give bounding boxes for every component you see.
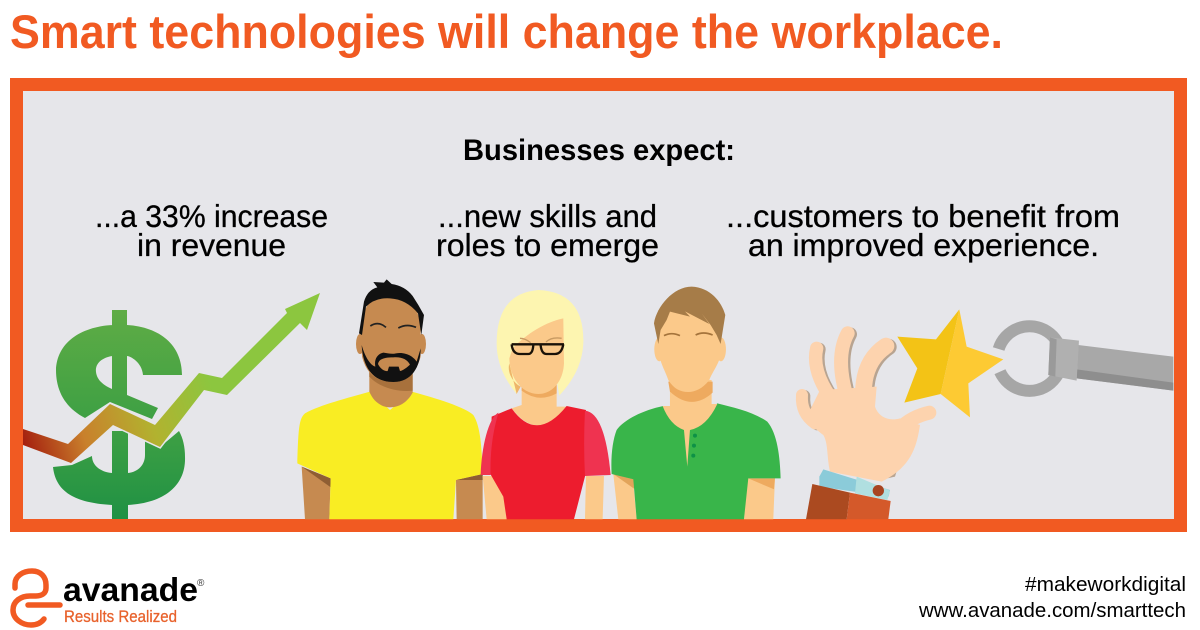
text block: customers: ...customers to benefit from <box>726 198 1120 234</box>
text block: skills <box>436 198 659 263</box>
footer text: #makeworkdigital <box>1025 573 1186 596</box>
tagline: Results Realized <box>64 607 177 626</box>
arrow: revenue trend <box>23 293 320 463</box>
registered mark: ® <box>197 578 205 589</box>
icon: star <box>897 309 1003 417</box>
icon: robotic wrench <box>999 326 1173 391</box>
text block: skills: ...new skills and <box>438 198 657 234</box>
icon: dollar sign with rising arrow <box>16 293 320 519</box>
panel: main frame <box>16 84 1180 526</box>
text block: revenue <box>95 198 328 263</box>
person: man in green shirt <box>611 287 781 519</box>
heading: businesses expect: Businesses expect: <box>463 134 735 167</box>
icon: logo mark <box>13 571 60 625</box>
hair <box>654 287 725 344</box>
text block: revenue: ...a 33% increase <box>95 198 328 234</box>
text block: customers <box>726 198 1120 263</box>
text block: skills: roles to emerge <box>436 227 659 263</box>
footer text <box>918 573 1186 622</box>
glasses <box>512 344 564 354</box>
text block: revenue: in revenue <box>137 227 286 263</box>
icon: dollar sign <box>53 310 185 519</box>
footer text: www.avanade.com/smarttech <box>918 599 1186 622</box>
beard <box>362 345 421 382</box>
hair back <box>497 290 583 395</box>
brand name: avanade <box>63 571 198 608</box>
title: Smart technologies will change the workplace. <box>10 5 1003 58</box>
logo: avanade <box>13 571 205 626</box>
person: man in yellow shirt <box>297 279 483 519</box>
face <box>509 318 564 394</box>
icon: hand reaching for star <box>802 333 929 519</box>
text block: customers: an improved experience. <box>748 227 1099 263</box>
hair <box>359 279 424 335</box>
person: woman in red shirt <box>481 290 611 519</box>
